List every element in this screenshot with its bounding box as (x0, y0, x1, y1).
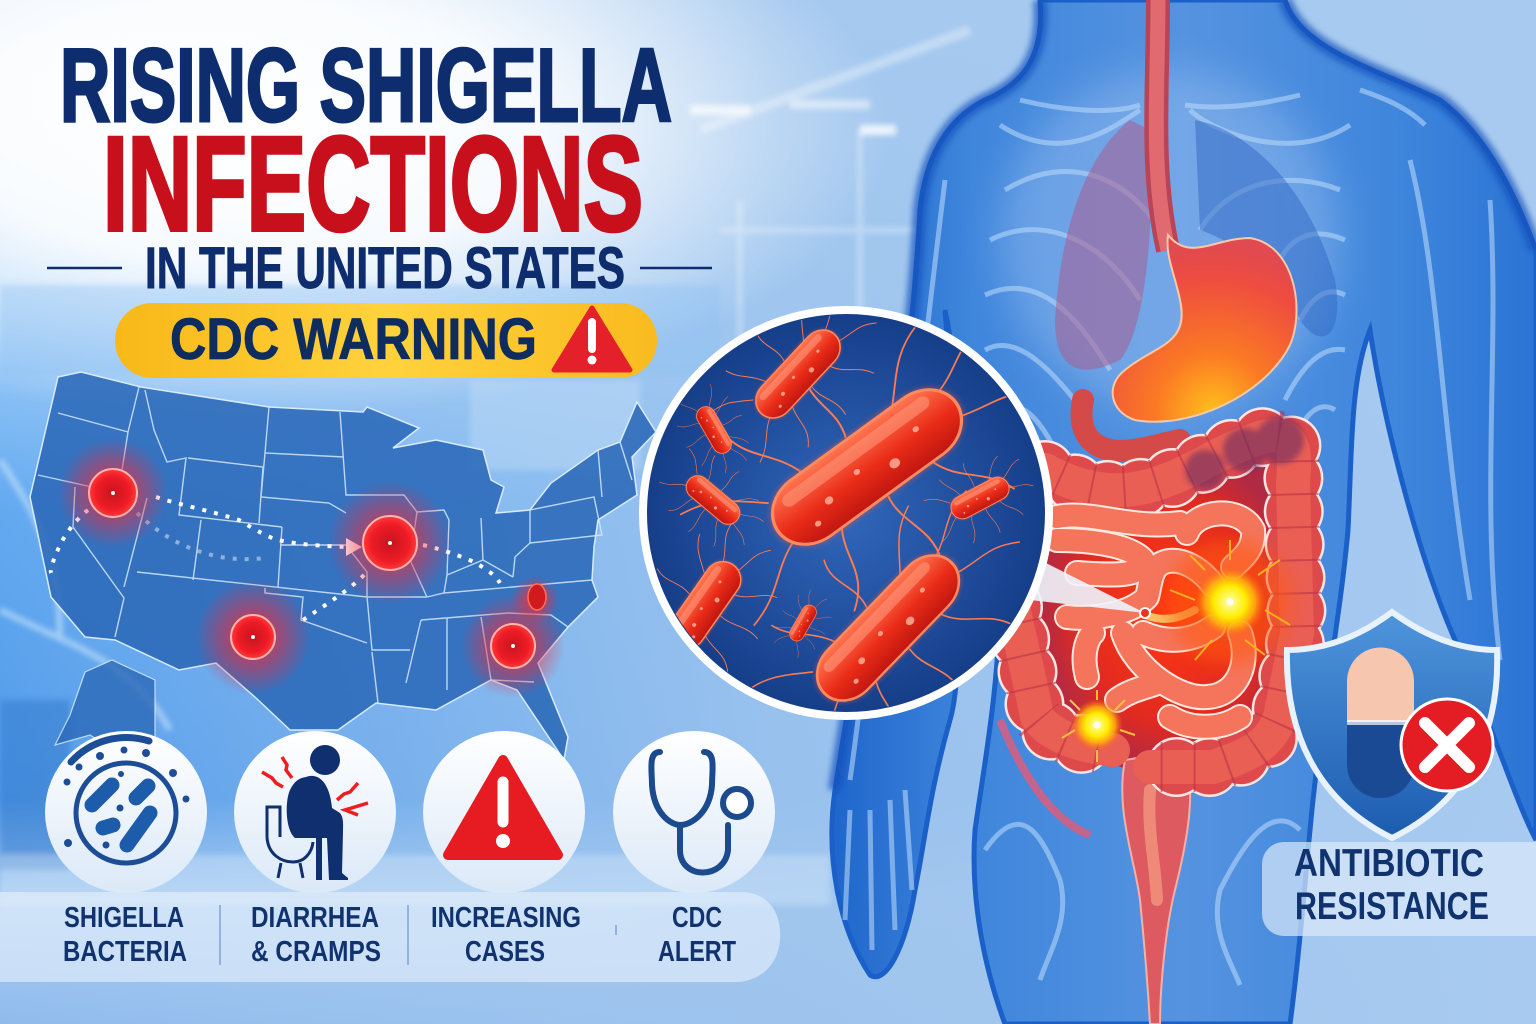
small intestine outline (1057, 513, 1253, 727)
lungs (1055, 120, 1337, 370)
pointer to magnifier (1030, 560, 1145, 613)
hotspot: southeast (461, 594, 565, 698)
rim shading (835, 0, 1536, 790)
antibiotic resistance label: ANTIBIOTIC (1294, 842, 1484, 885)
label: increasing cases: CASES (465, 936, 545, 968)
warning triangle (554, 308, 630, 370)
CDC warning banner (115, 303, 657, 378)
label: diarrhea and cramps: & CRAMPS (251, 936, 381, 968)
icon: shigella bacteria (45, 731, 207, 893)
silhouette (832, 0, 1536, 1024)
hotspot: carolinas (511, 576, 559, 624)
colon haustra (1013, 436, 1297, 767)
pill (115, 303, 657, 378)
label: increasing cases (431, 902, 581, 968)
small bacterium right (924, 456, 1034, 544)
top bacterium (714, 316, 876, 463)
colon segments (1013, 436, 1297, 767)
small intestine (1057, 513, 1253, 727)
icon: stethoscope (613, 731, 775, 893)
state lines (38, 387, 632, 703)
pointer dot (1140, 608, 1150, 618)
central bacterium (680, 327, 1016, 626)
magnified bacteria circle (639, 306, 1053, 720)
label: shigella bacteria: SHIGELLA (64, 902, 184, 934)
label: cdc alert: CDC (672, 902, 722, 934)
blurred hospital backdrop (0, 30, 970, 905)
esophagus (1156, 0, 1168, 250)
ureter (1000, 720, 1090, 835)
label: diarrhea and cramps (251, 902, 381, 968)
shield (1287, 612, 1497, 838)
label: diarrhea and cramps: DIARRHEA (251, 902, 379, 934)
title line 2: INFECTIONS (103, 110, 643, 259)
hotspot: southwest (195, 579, 311, 695)
alaska (55, 660, 155, 760)
rib cage and skeleton (845, 90, 1500, 985)
red x badge (1401, 699, 1493, 791)
colon dark end (1185, 416, 1304, 490)
rectum (1122, 750, 1190, 1024)
label strip (0, 892, 780, 982)
icon labels (63, 902, 736, 968)
icon: diarrhea and cramps (234, 731, 396, 893)
left bacterium (656, 524, 778, 672)
banner text: CDC WARNING (170, 307, 537, 372)
antibiotic resistance label (1262, 842, 1536, 936)
label: increasing cases: INCREASING (431, 902, 581, 934)
label: shigella bacteria (63, 902, 187, 968)
hotspot: west (58, 438, 168, 548)
yellow tube (1148, 610, 1195, 619)
map shape (30, 372, 656, 760)
label: shigella bacteria: BACTERIA (63, 936, 187, 968)
intestines (1013, 400, 1304, 767)
hotspot: midwest (328, 481, 452, 605)
antibiotic resistance shield (1287, 612, 1497, 838)
duodenum loop (1081, 400, 1180, 451)
secondary infection glow (1062, 690, 1135, 762)
capsule (1347, 648, 1414, 798)
colon outline (1013, 436, 1297, 767)
label: cdc alert: ALERT (658, 936, 736, 968)
infection glow (1168, 540, 1292, 664)
small bacterium left (659, 448, 764, 547)
mesentery backing (1040, 450, 1300, 770)
small bacterium upper left (677, 384, 749, 474)
title line 1: RISING SHIGELLA (60, 28, 672, 144)
title (60, 28, 672, 301)
stomach (1113, 235, 1297, 422)
spread arrows (51, 497, 500, 620)
lower bacterium (752, 490, 1020, 711)
small bacterium bottom (774, 589, 832, 658)
label: cdc alert (658, 902, 736, 968)
circle backdrop (643, 310, 1049, 716)
icon: increasing cases (423, 731, 585, 893)
chest highlight (1000, 70, 1340, 410)
title line 3: IN THE UNITED STATES (145, 236, 625, 301)
human body (832, 0, 1536, 1024)
US map (30, 372, 656, 760)
